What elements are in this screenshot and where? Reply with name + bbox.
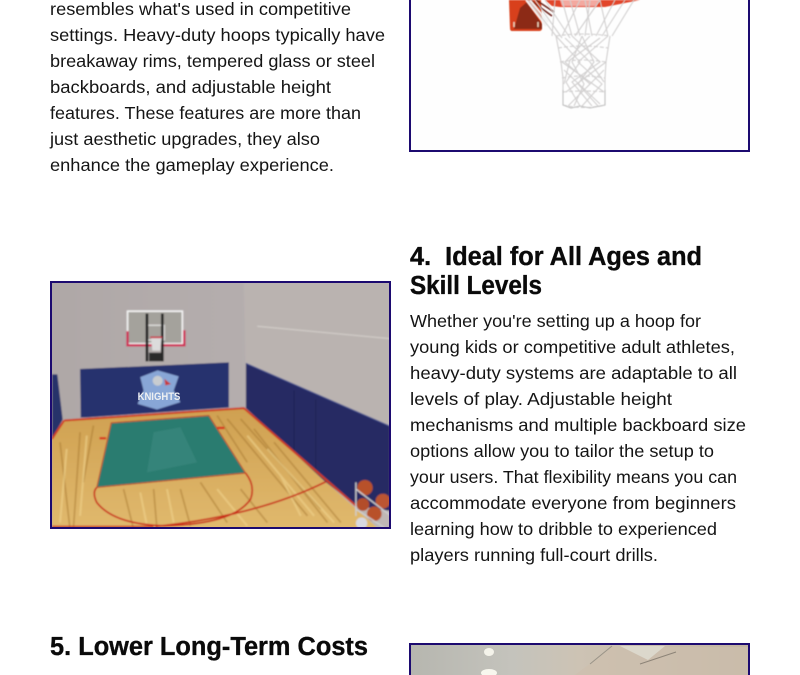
text block: section 3 body: breakaway rims, tempered glass or steel <box>50 51 375 71</box>
text block: section 4 body <box>410 311 746 565</box>
left wall pad <box>52 374 63 439</box>
text block: section 4 body: Whether you're setting up a hoop for <box>410 311 701 331</box>
icon: orange rim bracket <box>509 0 640 31</box>
text block: section 4 body: young kids or competitive adult athletes, <box>410 337 735 357</box>
red lines <box>52 408 356 506</box>
backboard <box>128 311 182 344</box>
panel: indoor court photo: KNIGHTS <box>138 391 181 403</box>
text block: section 4 body: options allow you to tailor the setup to <box>410 441 714 461</box>
text block: section 3 body: backboards, and adjustable height <box>50 77 331 97</box>
text block: section 4 body: accommodate everyone from beginners <box>410 493 736 513</box>
knights logo <box>138 370 180 410</box>
back wall pad <box>80 362 229 418</box>
text block: section 3 body: settings. Heavy-duty hoops typically have <box>50 25 385 45</box>
teal key <box>97 416 246 487</box>
panel: hoop photo <box>410 0 749 151</box>
text block: section 4 body: levels of play. Adjustable height <box>410 389 672 409</box>
text block: section 3 body <box>49 0 385 175</box>
heading: section 5: 5. Lower Long-Term Costs <box>50 633 368 661</box>
text block: section 3 body: enhance the gameplay experience. <box>50 155 334 175</box>
floor <box>52 408 390 539</box>
text block: section 4 body: your users. That flexibility means you can <box>410 467 737 487</box>
panel: bottom photo <box>410 644 749 675</box>
text block: section 3 body: features. These features are more than <box>50 103 361 123</box>
text block: section 4 body: mechanisms and multiple backboard size <box>410 415 746 435</box>
icon: white basketball net <box>526 0 634 108</box>
heading: section 4 <box>410 243 702 300</box>
text block: section 3 body: just aesthetic upgrades, they also <box>49 129 320 149</box>
text block: section 4 body: players running full-court drills. <box>410 545 658 565</box>
heading: section 4: Skill Levels <box>410 272 542 300</box>
side wall pad <box>246 363 390 511</box>
text block: section 4 body: heavy-duty systems are adaptable to all <box>410 363 737 383</box>
text block: section 4 body: learning how to dribble to experienced <box>410 519 717 539</box>
panel: indoor court photo <box>40 275 401 539</box>
heading: section 4: 4. Ideal for All Ages and <box>410 243 702 271</box>
ball rack <box>357 480 373 495</box>
